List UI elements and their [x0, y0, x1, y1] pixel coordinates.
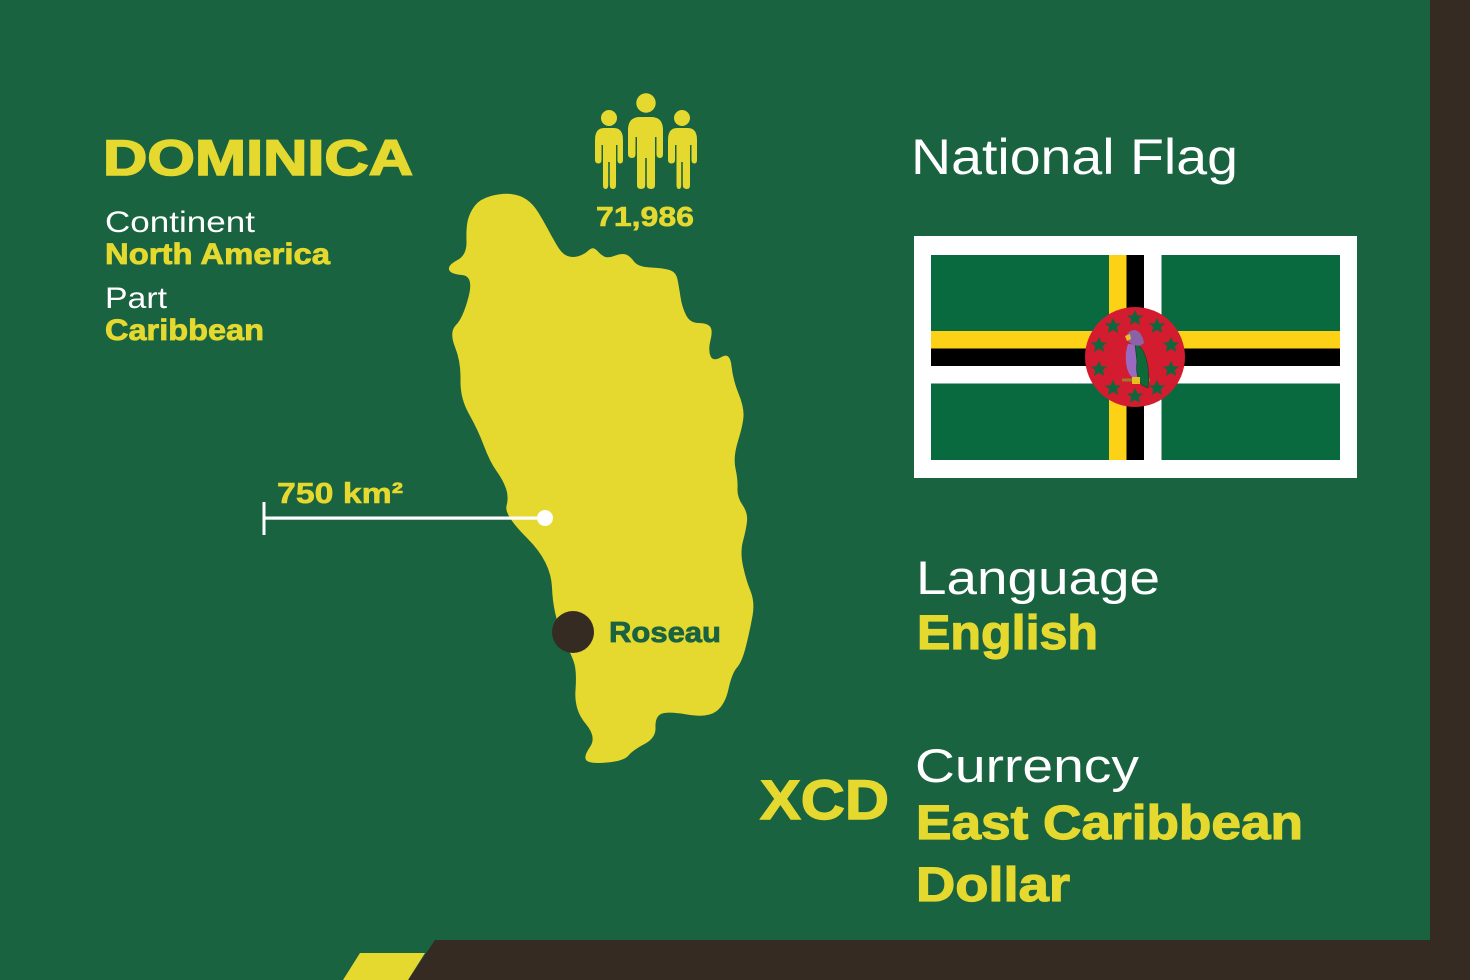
population figure: 71,986 — [596, 201, 694, 232]
text block: continent and part — [105, 206, 330, 347]
text block: continent and part: Part — [105, 282, 168, 315]
title: DOMINICA — [103, 130, 413, 186]
text block: currency: Currency — [915, 739, 1140, 792]
icon: three people population — [595, 93, 697, 189]
frame: brown right and bottom border — [408, 0, 1470, 980]
map: Dominica island — [449, 194, 753, 763]
area leader line — [262, 502, 553, 535]
heading: national flag: National Flag — [911, 129, 1238, 185]
text block: language — [916, 551, 1160, 660]
text block: continent and part: North America — [105, 238, 330, 271]
flag of Dominica — [914, 236, 1357, 478]
text block: continent and part: Continent — [105, 206, 256, 239]
text block: language: English — [917, 607, 1098, 660]
currency code: XCD — [760, 768, 889, 831]
capital marker — [552, 611, 594, 653]
text block: language: Language — [916, 551, 1160, 604]
accent: yellow parallelogram — [343, 953, 425, 980]
area label: 750 km² — [277, 478, 403, 510]
text block: currency: East Caribbean — [916, 797, 1303, 850]
text block: currency: Dollar — [916, 859, 1070, 912]
text block: continent and part: Caribbean — [105, 314, 264, 347]
capital label: Roseau — [609, 617, 721, 649]
text block: currency — [915, 739, 1303, 912]
